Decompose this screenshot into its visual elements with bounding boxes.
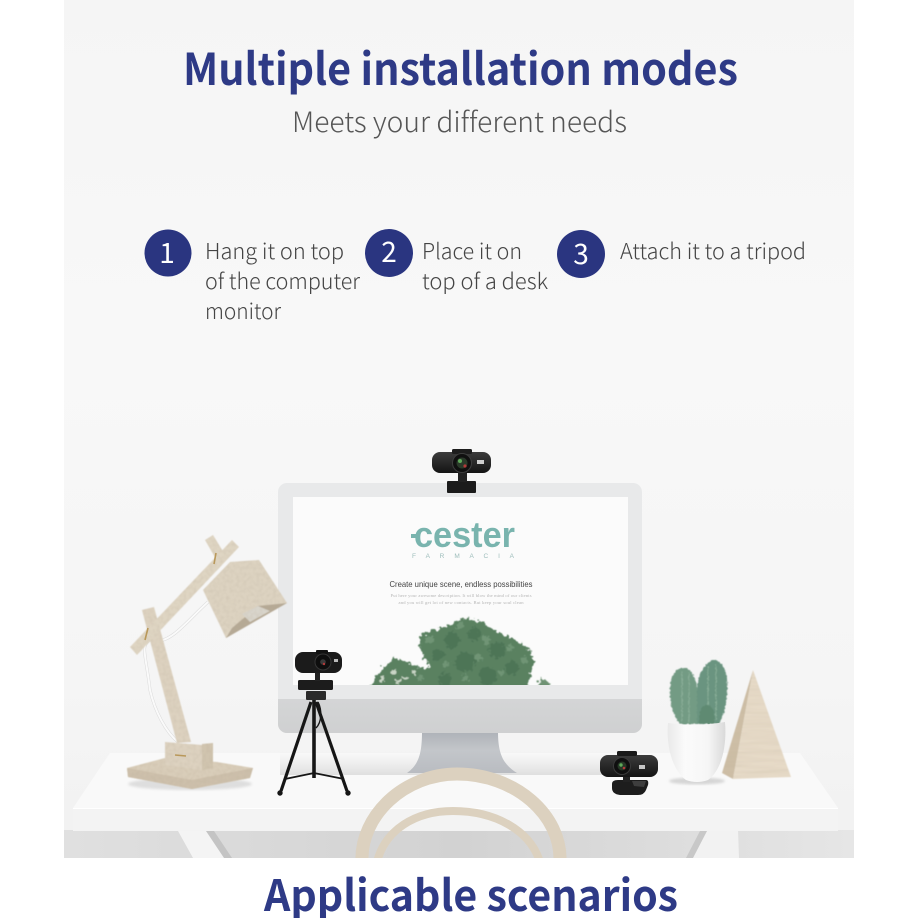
flower pot xyxy=(668,722,725,782)
screen body text: Put here your awesome description. It will blow the mind of our clients xyxy=(390,593,532,598)
webcam on desk xyxy=(600,751,658,795)
wooden pyramid xyxy=(722,670,791,779)
step 2 text: top of a desk xyxy=(422,264,549,296)
step 1 number badge: 1 xyxy=(159,232,175,272)
step 3 number badge xyxy=(557,230,605,278)
step 1: hang on monitor xyxy=(144,230,360,326)
step 1 text: monitor xyxy=(205,294,281,326)
step 1 number badge xyxy=(144,230,192,276)
step 3 number badge: 3 xyxy=(573,233,589,273)
cactus xyxy=(670,660,727,724)
title: Multiple installation modes xyxy=(183,34,738,98)
cactus plant xyxy=(668,660,727,784)
screen logo: cester xyxy=(414,514,515,555)
lamp brass clips xyxy=(145,553,216,756)
lamp post xyxy=(142,607,191,743)
step 1 text: Hang it on top xyxy=(205,234,344,266)
desk legs xyxy=(178,831,739,858)
screen headline: Create unique scene, endless possibilities xyxy=(390,579,532,589)
webcam on tripod xyxy=(278,650,350,795)
monitor body xyxy=(278,483,642,733)
step 2 number badge xyxy=(365,229,413,277)
monitor stand xyxy=(407,732,517,773)
step 3 text: Attach it to a tripod xyxy=(620,234,806,266)
step 3: attach to tripod xyxy=(557,230,806,278)
lamp wood parts xyxy=(127,535,287,789)
step 2 number badge: 2 xyxy=(381,231,397,271)
step 1 text: of the computer xyxy=(205,264,360,296)
lamp upper stub xyxy=(205,535,224,559)
subtitle: Meets your different needs xyxy=(292,101,627,141)
step 2: place on desk xyxy=(365,229,549,296)
chair back xyxy=(362,774,560,862)
lamp shade xyxy=(203,560,287,638)
monitor xyxy=(278,483,642,773)
screen logo: F A R M A C I A xyxy=(412,553,515,560)
lamp base block xyxy=(165,742,213,770)
lamp base shadow xyxy=(128,778,252,790)
tree on screen xyxy=(368,618,552,690)
step 2 text: Place it on xyxy=(422,234,522,266)
screen body text: and you will get lot of new contacts. But keep your soul clean xyxy=(398,600,524,605)
webcam on top of monitor xyxy=(432,449,491,493)
tripod xyxy=(278,700,350,795)
tripod head xyxy=(306,691,326,700)
monitor screen xyxy=(293,497,628,685)
lamp base xyxy=(127,758,253,789)
webcam body xyxy=(295,652,342,673)
lamp cable xyxy=(145,602,208,742)
desk xyxy=(64,752,854,858)
desk lamp xyxy=(127,535,287,790)
lamp arm xyxy=(130,540,239,655)
pot shadow xyxy=(669,778,725,784)
